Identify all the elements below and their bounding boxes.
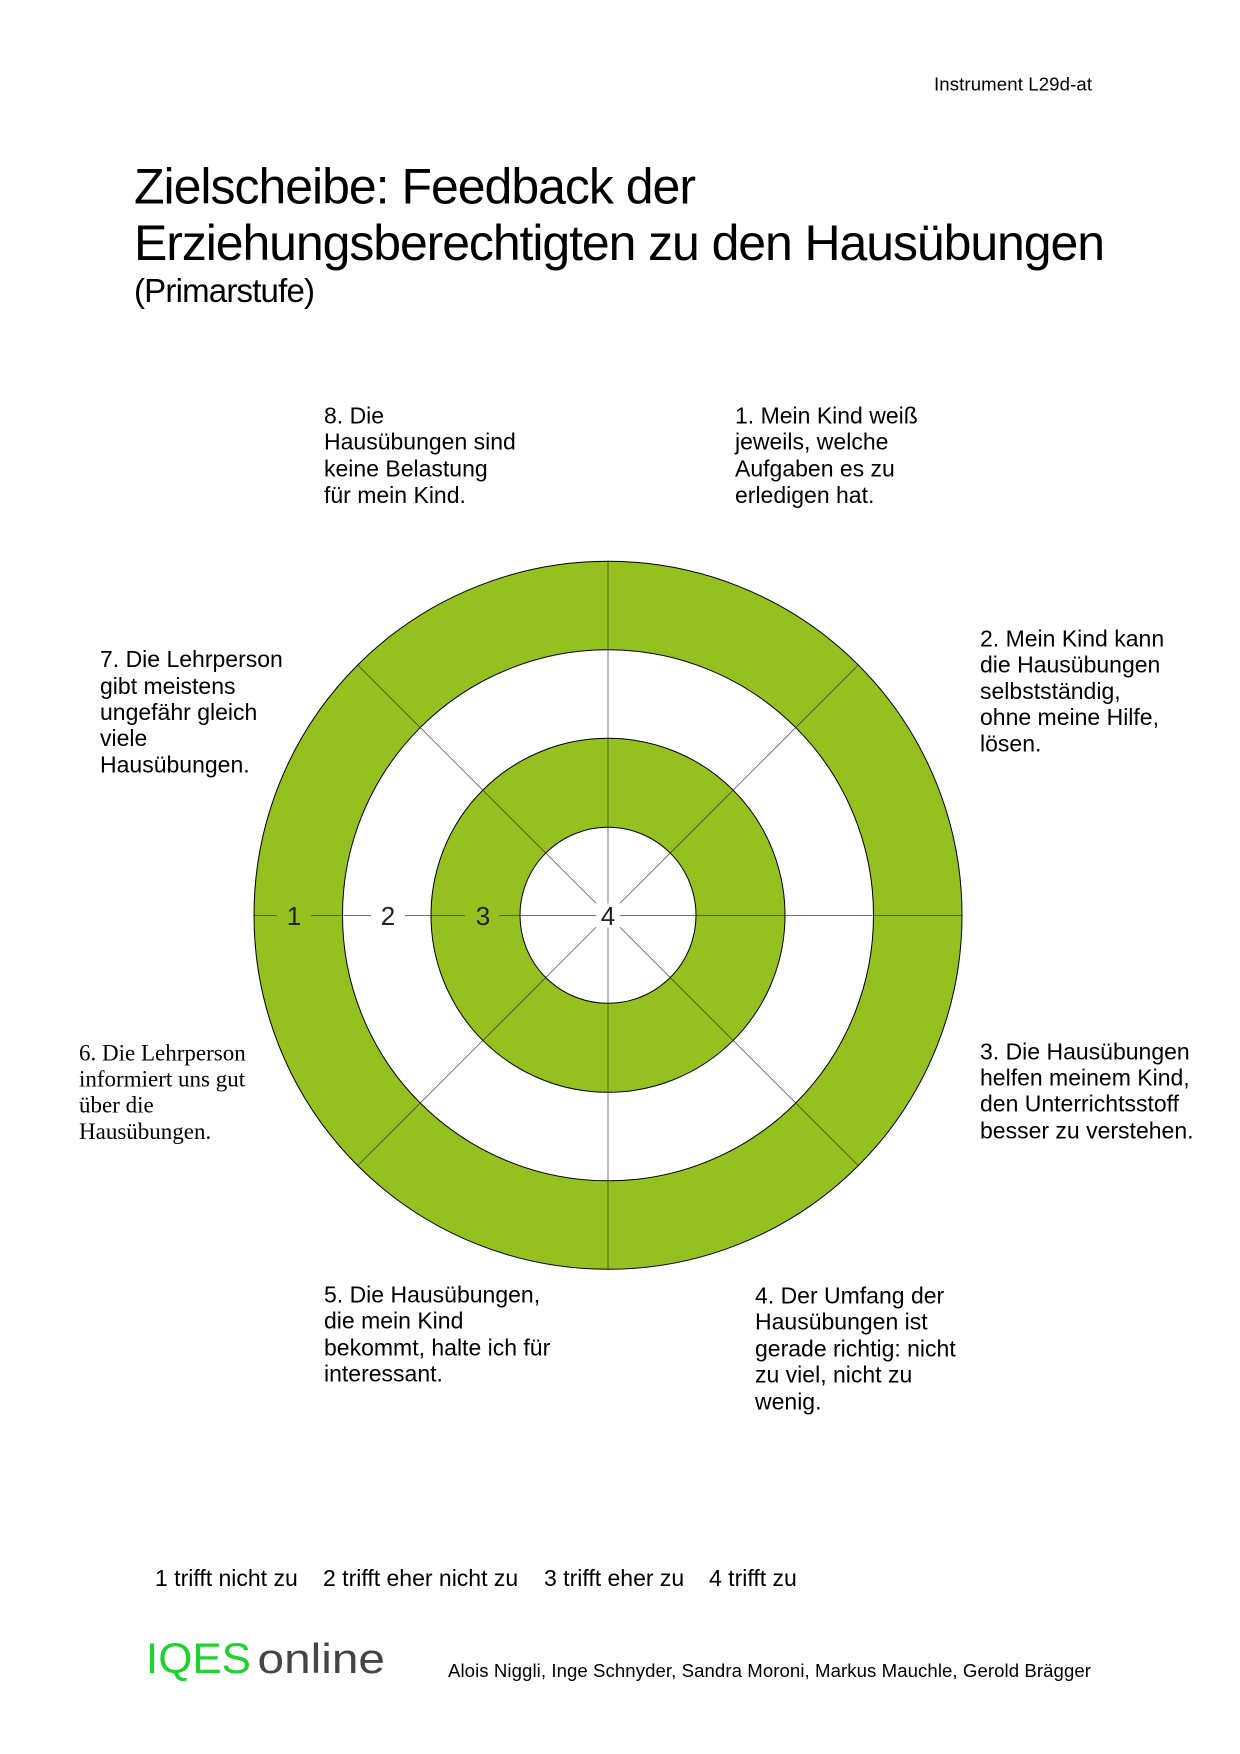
statement 7: 7. Die Lehrperson (100, 646, 283, 672)
statement 4: 4. Der Umfang der (755, 1282, 945, 1308)
logo: IQES online: online (258, 1635, 385, 1682)
scale numbers (287, 901, 615, 931)
statement 1: 1. Mein Kind weiß (735, 402, 918, 428)
scale numbers: 2 (381, 901, 395, 931)
title: Erziehungsberechtigten zu den Hausübungen (134, 215, 1105, 271)
statement 7: gibt meistens (100, 673, 236, 699)
statement 2: lösen. (980, 730, 1041, 756)
statement 8: Hausübungen sind (324, 428, 516, 454)
green outer ring (254, 561, 962, 1269)
statement 2: 2. Mein Kind kann (980, 626, 1164, 652)
statement 1: jeweils, welche (734, 428, 888, 454)
statement 3: helfen meinem Kind, (980, 1064, 1190, 1090)
statement 4: Hausübungen ist (755, 1308, 928, 1334)
statement 5: interessant. (324, 1360, 443, 1386)
statement 8 (324, 402, 516, 508)
statement 2: selbstständig, (980, 678, 1121, 704)
statement 8: 8. Die (324, 402, 384, 428)
statement 6: informiert uns gut (79, 1066, 246, 1092)
scale numbers: 3 (476, 901, 490, 931)
statement 6: über die (79, 1092, 154, 1118)
green inner ring (431, 738, 785, 1092)
legend: 4 trifft zu (709, 1565, 797, 1591)
legend: 3 trifft eher zu (544, 1565, 684, 1591)
statement 5: 5. Die Hausübungen, (324, 1282, 540, 1308)
spokes (254, 561, 962, 1270)
authors: Alois Niggli, Inge Schnyder, Sandra Moroni, Markus Mauchle, Gerold Brägger (448, 1660, 1091, 1681)
statement 4: zu viel, nicht zu (755, 1362, 912, 1388)
statement 6: Hausübungen. (79, 1119, 211, 1144)
statement 3 (980, 1038, 1194, 1144)
legend (155, 1565, 797, 1591)
statement 5: bekommt, halte ich für (324, 1334, 551, 1360)
statement 7: viele (100, 725, 147, 751)
statement 5 (324, 1282, 551, 1386)
statement 6 (79, 1040, 246, 1144)
white ring (342, 650, 874, 1181)
statement 2: die Hausübungen (980, 652, 1160, 678)
statement 8: für mein Kind. (324, 482, 466, 508)
statement 1 (734, 402, 918, 508)
statement 2 (980, 626, 1164, 756)
statement 8: keine Belastung (324, 456, 488, 482)
instrument label: Instrument L29d-at (934, 74, 1093, 94)
title (134, 158, 1105, 271)
statement 2: ohne meine Hilfe, (980, 704, 1159, 730)
statement 3: 3. Die Hausübungen (980, 1038, 1190, 1064)
title: Zielscheibe: Feedback der (134, 158, 696, 214)
statement 1: Aufgaben es zu (735, 456, 895, 482)
statement 7: ungefähr gleich (100, 699, 257, 725)
statement 5: die mein Kind (324, 1308, 463, 1334)
statement 4: gerade richtig: nicht (755, 1336, 956, 1362)
scale numbers: 1 (287, 901, 301, 931)
legend: 2 trifft eher nicht zu (323, 1565, 518, 1591)
statement 1: erledigen hat. (735, 482, 874, 508)
logo: IQES online (146, 1635, 385, 1683)
statement 7: Hausübungen. (100, 752, 250, 778)
white centre (520, 827, 696, 1003)
scale numbers: 4 (601, 901, 615, 931)
statement 7 (100, 646, 283, 778)
statement 3: besser zu verstehen. (980, 1118, 1194, 1144)
logo: IQES online: IQES (146, 1635, 251, 1683)
statement 4: wenig. (754, 1388, 821, 1414)
statement 4 (754, 1282, 956, 1414)
legend: 1 trifft nicht zu (155, 1565, 298, 1591)
statement 6: 6. Die Lehrperson (79, 1040, 246, 1066)
target chart (254, 561, 962, 1270)
statement 3: den Unterrichtsstoff (980, 1090, 1180, 1116)
subtitle: (Primarstufe) (134, 272, 315, 309)
